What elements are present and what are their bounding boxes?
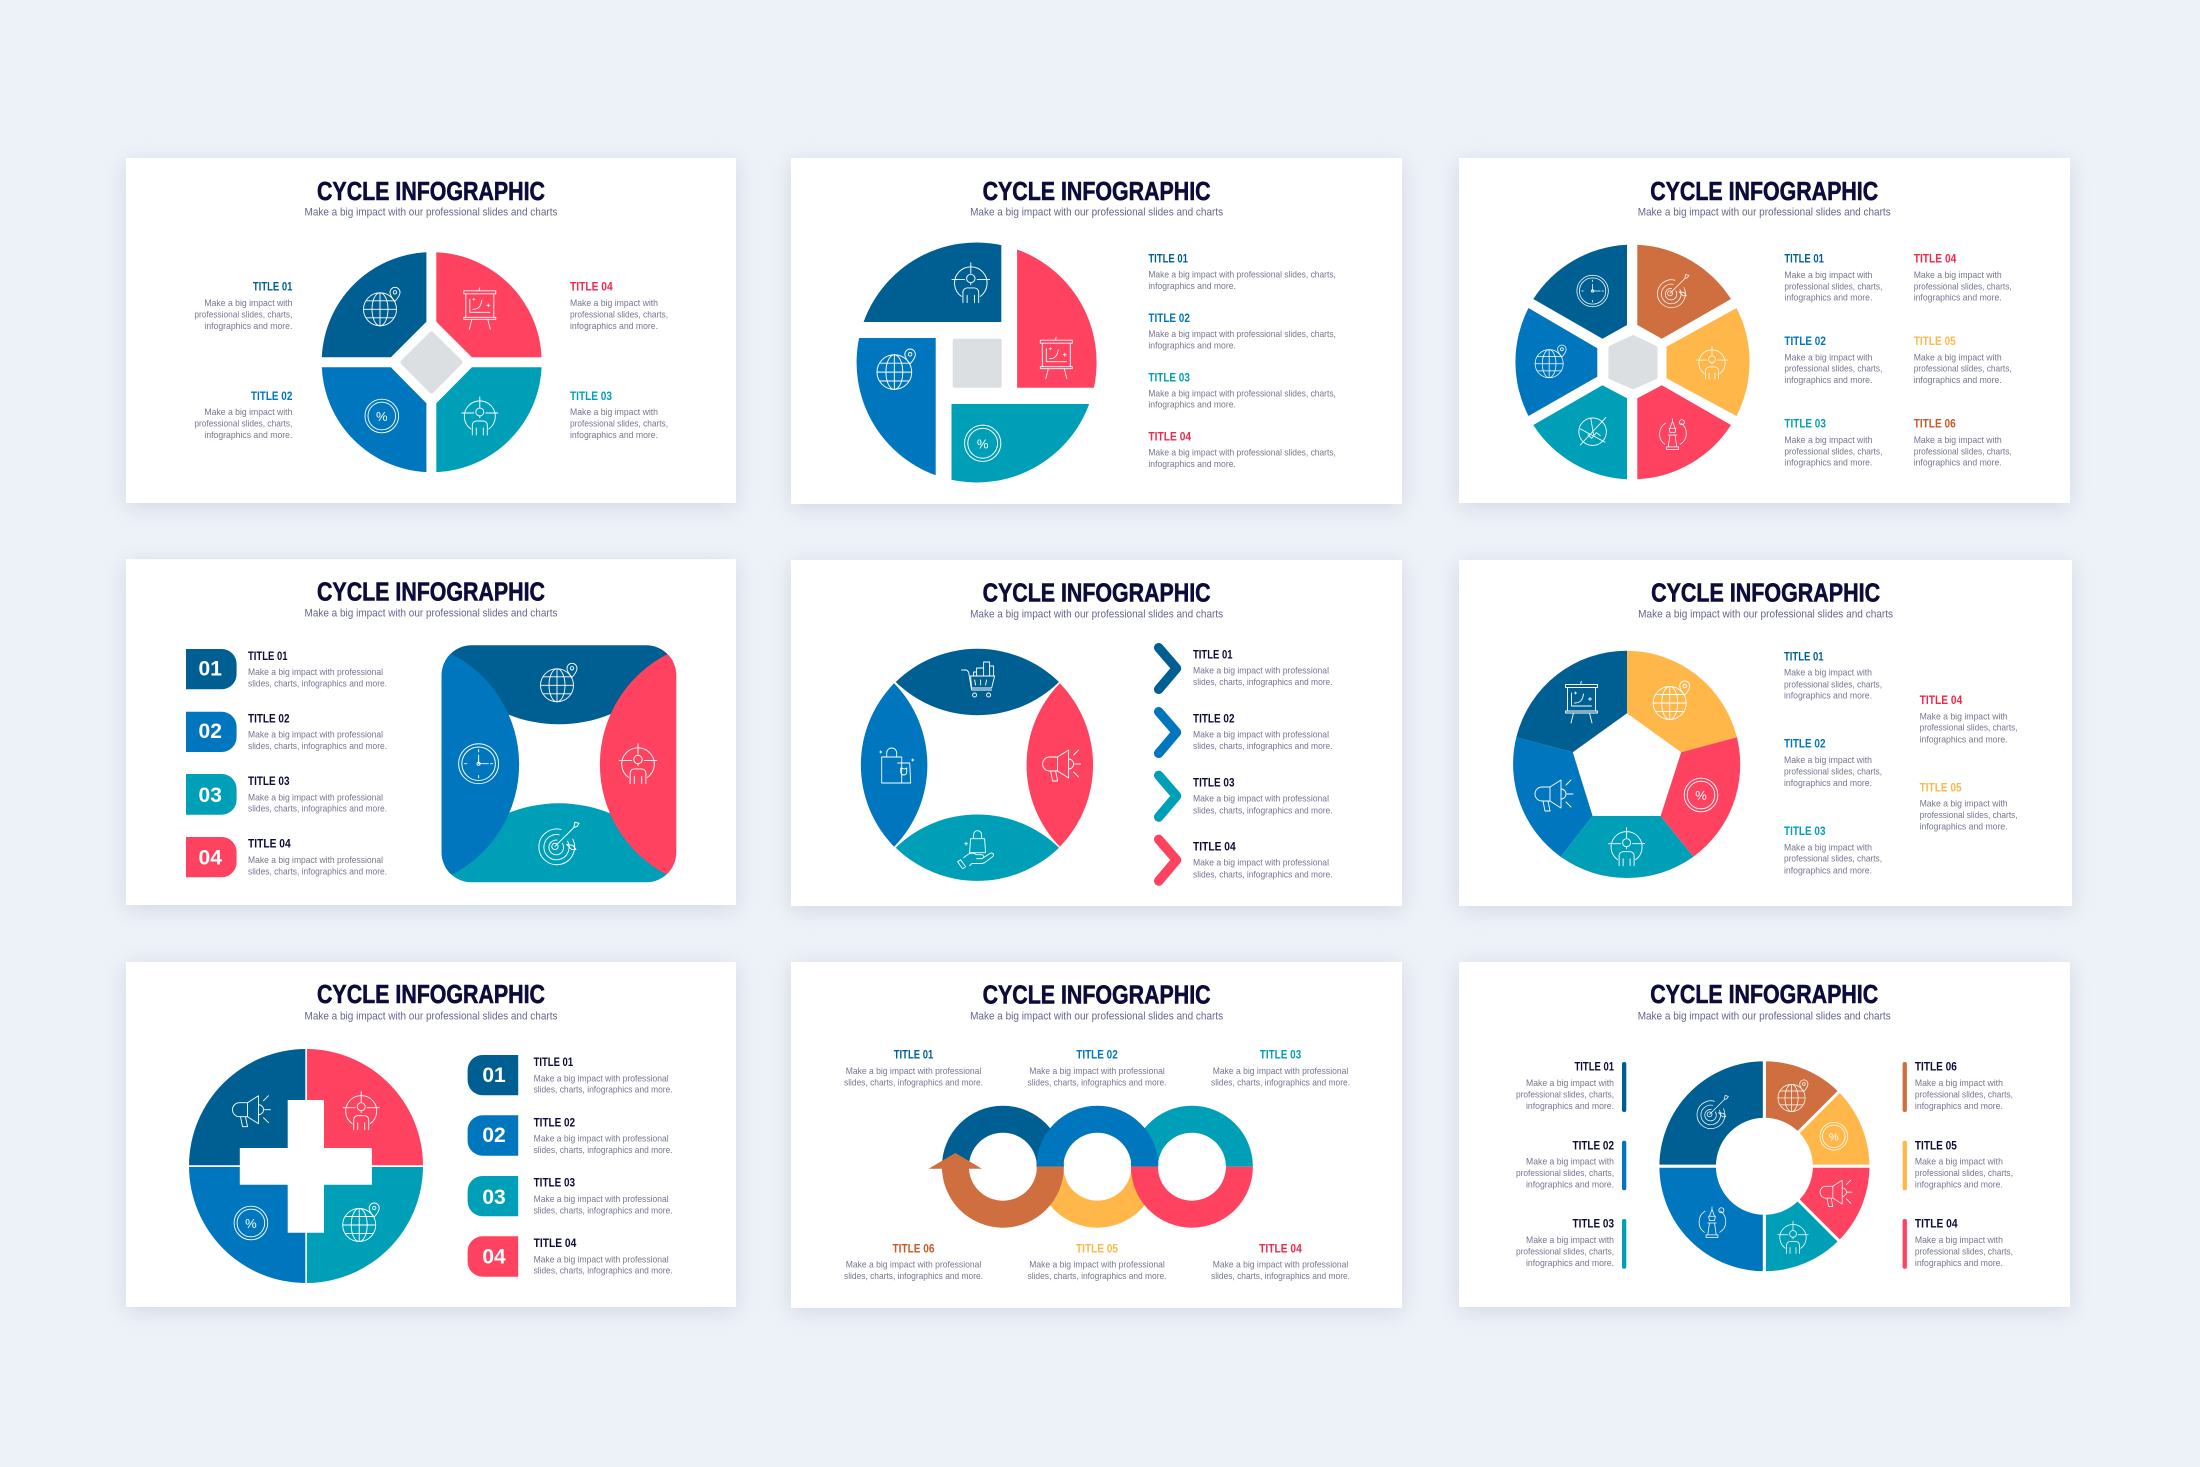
text: title 04: Make a big impact with professional [534, 1253, 669, 1264]
text: title 02: TITLE 02 [1193, 714, 1234, 726]
text: title 02: Make a big impact with professional [248, 729, 383, 740]
text: title 05 [1915, 1140, 2013, 1190]
text: title 03: professional slides, charts, [1516, 1245, 1614, 1256]
text: title 05: TITLE 05 [1915, 1140, 1957, 1152]
text: title 04 [1211, 1243, 1350, 1281]
heading [1638, 981, 1891, 1022]
text: title 02: professional slides, charts, [1516, 1167, 1614, 1178]
text: title 05: Make a big impact with [1915, 1156, 2003, 1167]
bar 06 [1903, 1062, 1907, 1112]
text: title 03 [1211, 1050, 1350, 1088]
text: title 02 [1028, 1050, 1166, 1088]
text: title 02: Make a big impact with [204, 406, 292, 417]
cycle diagram: % [977, 436, 989, 451]
heading: Make a big impact with our professional slides and charts [1638, 1010, 1891, 1022]
text: title 01: TITLE 01 [534, 1057, 574, 1069]
text: title 04: slides, charts, infographics and more. [248, 865, 387, 876]
heading: CYCLE INFOGRAPHIC [317, 178, 545, 206]
text: title 03: professional slides, charts, [1784, 445, 1882, 456]
text: title 01 [194, 282, 293, 331]
text: title 05: TITLE 05 [1914, 336, 1956, 348]
text: title 06: professional slides, charts, [1914, 445, 2012, 456]
heading: CYCLE INFOGRAPHIC [1651, 579, 1880, 607]
text: title 04 [1920, 695, 2018, 744]
text: title 02 [248, 713, 387, 751]
text: title 03: slides, charts, infographics and more. [1193, 804, 1333, 815]
text: title 02: slides, charts, infographics and more. [1028, 1077, 1166, 1088]
heading [304, 178, 558, 219]
number tab 03 [186, 774, 237, 815]
cycle diagram: % [245, 1216, 257, 1231]
text: title 03: TITLE 03 [1193, 778, 1234, 790]
text: title 02: infographics and more. [1784, 777, 1872, 788]
text: title 02: professional slides, charts, [194, 418, 292, 428]
text: title 03: TITLE 03 [534, 1178, 575, 1190]
text: title 06: TITLE 06 [1914, 419, 1956, 431]
text: title 04 [1193, 842, 1333, 879]
number tab 03: 03 [199, 784, 222, 807]
text: title 04: infographics and more. [1920, 733, 2008, 744]
text: title 01: slides, charts, infographics and more. [1193, 676, 1333, 687]
text: title 04: TITLE 04 [1915, 1219, 1958, 1231]
card background [791, 560, 1402, 906]
text: title 01 [1784, 651, 1882, 701]
card background [1459, 158, 2070, 503]
number tab 04: 04 [199, 846, 222, 870]
text: title 05: infographics and more. [1915, 1179, 2003, 1190]
text: title 03: Make a big impact with [1526, 1234, 1614, 1245]
text: title 04: infographics and more. [1915, 1257, 2003, 1268]
arrow head [928, 1153, 982, 1169]
card background [126, 962, 736, 1307]
text: title 01: TITLE 01 [248, 651, 288, 663]
chevron 4 [1159, 839, 1176, 881]
cycle diagram [1658, 1060, 1871, 1273]
text: title 02 [534, 1117, 673, 1155]
text: title 04: slides, charts, infographics and more. [1211, 1270, 1350, 1281]
text: title 02 [1516, 1140, 1614, 1190]
text: title 02: infographics and more. [1526, 1179, 1614, 1190]
heading: Make a big impact with our professional slides and charts [970, 609, 1224, 621]
text: title 04 [1914, 254, 2012, 303]
heading: CYCLE INFOGRAPHIC [983, 981, 1211, 1009]
card background [126, 158, 736, 503]
chevron 1 [1159, 648, 1176, 689]
text: title 03: infographics and more. [1148, 399, 1236, 410]
cycle diagram: % [376, 409, 388, 424]
text: title 01 [844, 1050, 983, 1088]
number tab 04 [186, 837, 237, 877]
heading: CYCLE INFOGRAPHIC [1650, 178, 1878, 206]
text: title 01: TITLE 01 [1148, 254, 1188, 266]
text: title 01: infographics and more. [1526, 1100, 1614, 1111]
number tab 01: 01 [199, 658, 222, 681]
text: title 06: infographics and more. [1915, 1100, 2003, 1111]
text: title 03: Make a big impact with professional [534, 1193, 669, 1204]
text: title 05: slides, charts, infographics and more. [1028, 1270, 1166, 1281]
text: title 03 [1516, 1219, 1614, 1268]
text: title 03: TITLE 03 [1148, 372, 1190, 384]
text: title 01: Make a big impact with [204, 297, 292, 308]
bar 03 [1622, 1219, 1626, 1269]
text: title 01: TITLE 01 [1574, 1062, 1614, 1074]
cycle diagram [189, 1049, 423, 1283]
text: title 02: professional slides, charts, [1784, 363, 1882, 374]
heading: Make a big impact with our professional slides and charts [970, 1011, 1224, 1023]
cycle diagram: % [1695, 788, 1707, 803]
text: title 02: slides, charts, infographics and more. [1193, 740, 1333, 751]
text: title 04: TITLE 04 [1148, 432, 1192, 444]
text: title 04: slides, charts, infographics and more. [534, 1265, 673, 1276]
text: title 02: infographics and more. [1784, 374, 1872, 385]
text: title 04: infographics and more. [1148, 458, 1236, 469]
text: title 02 [1784, 336, 1882, 385]
text: title 05: professional slides, charts, [1914, 363, 2012, 374]
text: title 04: professional slides, charts, [570, 308, 668, 320]
text: title 04: TITLE 04 [1259, 1243, 1302, 1255]
number tab 04: 04 [482, 1246, 506, 1268]
text: title 04: TITLE 04 [248, 839, 291, 851]
text: title 03 [1193, 778, 1333, 815]
text: title 06: infographics and more. [1914, 457, 2002, 468]
text: title 02: TITLE 02 [248, 713, 290, 725]
text: title 06: professional slides, charts, [1915, 1089, 2013, 1100]
text: title 06: TITLE 06 [1915, 1062, 1957, 1074]
text: title 04: Make a big impact with [1914, 269, 2002, 280]
text: title 03: infographics and more. [1784, 457, 1872, 468]
panel 4: rounded square cycle with number tabs [120, 558, 742, 914]
text: title 03 [1148, 372, 1336, 410]
text: title 05 [1914, 336, 2012, 385]
text: title 02: slides, charts, infographics and more. [534, 1144, 673, 1155]
text: title 01: professional slides, charts, [1784, 280, 1882, 291]
text: title 02: TITLE 02 [1076, 1050, 1118, 1062]
text: title 01: infographics and more. [1784, 690, 1872, 701]
text: title 03 [248, 776, 387, 814]
number tab 02: 02 [482, 1124, 506, 1147]
text: title 03: Make a big impact with professional [248, 791, 383, 802]
text: title 02: TITLE 02 [1572, 1140, 1614, 1152]
text: title 04: Make a big impact with [1920, 710, 2008, 721]
text: title 02: TITLE 02 [1148, 313, 1190, 325]
heading: Make a big impact with our professional slides and charts [970, 207, 1224, 219]
panel 9: six-part donut with side bars [1459, 962, 2070, 1307]
text: title 03: slides, charts, infographics and more. [534, 1204, 673, 1215]
heading: CYCLE INFOGRAPHIC [317, 579, 545, 607]
text: title 02: Make a big impact with professional [1029, 1065, 1165, 1076]
panel 3: six-part hexagon wheel [1459, 158, 2070, 503]
text: title 01 [1148, 254, 1336, 291]
text: title 02: slides, charts, infographics and more. [248, 740, 387, 751]
text: title 03: Make a big impact with [1784, 841, 1872, 852]
text: title 03: infographics and more. [570, 429, 658, 440]
text: title 05: Make a big impact with [1914, 351, 2002, 362]
text: title 01: infographics and more. [204, 320, 292, 331]
heading [1638, 178, 1891, 219]
text: title 04: TITLE 04 [534, 1238, 577, 1250]
text: title 01: Make a big impact with professional [534, 1072, 669, 1083]
text: title 01: infographics and more. [1148, 280, 1236, 291]
bar 04 [1903, 1219, 1907, 1269]
text: title 02: Make a big impact with professional [534, 1133, 669, 1144]
text: title 06 [844, 1243, 983, 1281]
number tab 02: 02 [199, 720, 222, 743]
text: title 06: Make a big impact with professional [846, 1259, 981, 1270]
text: title 04: TITLE 04 [570, 282, 613, 294]
text: title 03: TITLE 03 [570, 391, 612, 403]
text: title 03 [570, 391, 668, 440]
bar 02 [1622, 1141, 1626, 1190]
text: title 06 [1914, 419, 2012, 468]
card background [1459, 560, 2072, 906]
card background [1459, 962, 2070, 1307]
text: title 04: TITLE 04 [1914, 254, 1957, 266]
text: title 04 [248, 839, 387, 876]
chevron 3 [1159, 775, 1176, 817]
text: title 05 [1028, 1243, 1166, 1281]
text: title 01: TITLE 01 [894, 1050, 934, 1062]
panel 8: interlocking rings [791, 962, 1402, 1308]
text: title 02: Make a big impact with professional slides, charts, [1148, 328, 1336, 339]
cycle diagram [442, 645, 676, 882]
text: title 03 [1784, 826, 1882, 875]
text: title 04: infographics and more. [570, 320, 658, 331]
text: title 02: Make a big impact with [1784, 754, 1872, 765]
text: title 03: TITLE 03 [1260, 1050, 1301, 1062]
cycle diagram [1515, 245, 1750, 479]
heading: Make a big impact with our professional slides and charts [304, 608, 558, 620]
text: title 04: Make a big impact with [1915, 1234, 2003, 1245]
text: title 03: Make a big impact with [1784, 434, 1872, 445]
panel 2: offset quarter circle [791, 158, 1402, 504]
text: title 01: infographics and more. [1784, 292, 1872, 303]
bar 05 [1903, 1141, 1907, 1190]
text: title 03: TITLE 03 [1784, 419, 1826, 431]
text: title 02: infographics and more. [1148, 339, 1236, 350]
text: title 04: Make a big impact with [570, 297, 658, 308]
text: title 03: Make a big impact with [570, 406, 658, 417]
text: title 01: professional slides, charts, [1784, 678, 1882, 689]
heading [304, 579, 558, 620]
text: title 01: Make a big impact with professional slides, charts, [1148, 269, 1336, 280]
cycle diagram [857, 243, 1097, 482]
text: title 01: slides, charts, infographics and more. [248, 678, 387, 689]
heading: Make a big impact with our professional slides and charts [304, 207, 558, 219]
text: title 02: infographics and more. [204, 429, 292, 440]
text: title 01: slides, charts, infographics and more. [534, 1084, 673, 1095]
text: title 03: infographics and more. [1526, 1257, 1614, 1268]
heading: CYCLE INFOGRAPHIC [317, 981, 545, 1009]
text: title 01: professional slides, charts, [194, 308, 292, 320]
text: title 02: Make a big impact with professional [1193, 729, 1329, 740]
text: title 04 [570, 282, 668, 331]
text: title 01: Make a big impact with [1784, 667, 1872, 678]
text: title 03: professional slides, charts, [1784, 853, 1882, 864]
heading: Make a big impact with our professional slides and charts [1638, 609, 1894, 621]
text: title 06 [1915, 1062, 2013, 1111]
cycle diagram [322, 252, 542, 472]
text: title 03: professional slides, charts, [570, 418, 668, 428]
number tab 02 [186, 712, 237, 752]
panel 1: four-part circle with diamond centre [126, 158, 736, 503]
heading [1638, 579, 1894, 621]
panel 6: pentagon ring [1459, 560, 2072, 906]
number tab 01: 01 [482, 1064, 506, 1087]
panel 5: four lens shapes with chevrons [791, 560, 1402, 906]
card background [791, 962, 1402, 1308]
text: title 01: Make a big impact with professional [1193, 665, 1329, 676]
text: title 02 [1784, 739, 1882, 788]
text: title 04: slides, charts, infographics and more. [1193, 868, 1333, 879]
text: title 02: TITLE 02 [534, 1117, 575, 1129]
text: title 01: Make a big impact with professional [846, 1065, 981, 1076]
text: title 03: TITLE 03 [1784, 826, 1826, 838]
text: title 04 [534, 1238, 673, 1276]
text: title 02 [1148, 313, 1336, 350]
chevron 2 [1159, 712, 1176, 753]
bar 01 [1622, 1062, 1626, 1112]
number tab 04 [468, 1236, 518, 1277]
text: title 01: Make a big impact with [1526, 1077, 1614, 1088]
text: title 06: slides, charts, infographics and more. [844, 1270, 983, 1281]
text: title 02: TITLE 02 [251, 391, 292, 403]
text: title 04 [1915, 1219, 2013, 1268]
number tab 01 [468, 1055, 518, 1095]
panel 7: circle with plus cut-out [126, 962, 736, 1307]
cycle diagram [1513, 651, 1740, 878]
text: title 01 [534, 1057, 673, 1095]
text: title 03: TITLE 03 [1572, 1219, 1614, 1231]
card background [791, 158, 1402, 504]
text: title 05: Make a big impact with [1920, 798, 2008, 809]
text: title 03: slides, charts, infographics and more. [1211, 1077, 1350, 1088]
heading: CYCLE INFOGRAPHIC [983, 579, 1211, 607]
text: title 01: TITLE 01 [1784, 254, 1824, 266]
text: title 01: professional slides, charts, [1516, 1089, 1614, 1100]
text: title 02: professional slides, charts, [1784, 765, 1882, 776]
text: title 05: professional slides, charts, [1920, 809, 2018, 820]
text: title 01: Make a big impact with professional [248, 666, 383, 677]
text: title 01: TITLE 01 [1193, 649, 1233, 661]
text: title 04: professional slides, charts, [1914, 280, 2012, 291]
heading: CYCLE INFOGRAPHIC [983, 178, 1211, 206]
text: title 01 [248, 651, 387, 689]
text: title 04: professional slides, charts, [1915, 1245, 2013, 1256]
text: title 03: Make a big impact with professional [1193, 793, 1329, 804]
text: title 02 [194, 391, 292, 440]
heading: CYCLE INFOGRAPHIC [1650, 981, 1878, 1009]
text: title 02: TITLE 02 [1784, 336, 1826, 348]
text: title 02: TITLE 02 [1784, 739, 1826, 751]
heading [970, 178, 1224, 219]
text: title 05 [1920, 782, 2018, 832]
text: title 04: Make a big impact with professional [1193, 857, 1329, 868]
text: title 02: Make a big impact with [1784, 351, 1872, 362]
text: title 06: Make a big impact with [1914, 434, 2002, 445]
text: title 03: Make a big impact with professional slides, charts, [1148, 387, 1336, 398]
card background [126, 559, 736, 905]
text: title 05: professional slides, charts, [1915, 1167, 2013, 1178]
text: title 01 [1193, 649, 1333, 687]
text: title 03: infographics and more. [1784, 864, 1872, 875]
text: title 01: TITLE 01 [1784, 651, 1824, 663]
number tab 03: 03 [482, 1186, 506, 1209]
text: title 04: TITLE 04 [1193, 842, 1236, 854]
text: title 02: Make a big impact with [1526, 1156, 1614, 1167]
text: title 05: infographics and more. [1920, 821, 2008, 832]
cycle diagram [928, 1106, 1253, 1228]
text: title 03 [1784, 419, 1882, 468]
heading [304, 981, 558, 1022]
heading [970, 981, 1224, 1023]
text: title 03: slides, charts, infographics and more. [248, 803, 387, 814]
text: title 01 [1784, 254, 1882, 303]
heading: Make a big impact with our professional slides and charts [304, 1010, 558, 1022]
text: title 01: slides, charts, infographics and more. [844, 1077, 983, 1088]
text: title 04: infographics and more. [1914, 292, 2002, 303]
cycle diagram: % [1829, 1131, 1839, 1143]
text: title 04: Make a big impact with professional slides, charts, [1148, 447, 1336, 458]
text: title 05: TITLE 05 [1076, 1243, 1119, 1255]
text: title 04: Make a big impact with professional [248, 854, 383, 865]
text: title 01: Make a big impact with [1784, 269, 1872, 280]
text: title 04 [1148, 432, 1336, 469]
heading: Make a big impact with our professional slides and charts [1638, 207, 1891, 219]
cycle diagram [861, 649, 1093, 881]
number tab 01 [186, 649, 237, 689]
number tab 03 [468, 1176, 518, 1216]
text: title 05: TITLE 05 [1920, 782, 1962, 794]
text: title 05: Make a big impact with professional [1029, 1259, 1165, 1270]
text: title 04: professional slides, charts, [1920, 722, 2018, 733]
text: title 01: TITLE 01 [253, 282, 293, 294]
text: title 02 [1193, 714, 1333, 751]
text: title 01 [1516, 1062, 1614, 1111]
text: title 03 [534, 1178, 673, 1215]
number tab 02 [468, 1115, 518, 1156]
text: title 03: Make a big impact with professional [1213, 1065, 1348, 1076]
text: title 05: infographics and more. [1914, 374, 2002, 385]
heading [970, 579, 1224, 621]
text: title 04: TITLE 04 [1920, 695, 1963, 707]
text: title 03: TITLE 03 [248, 776, 290, 788]
text: title 04: Make a big impact with professional [1213, 1259, 1348, 1270]
text: title 06: Make a big impact with [1915, 1077, 2003, 1088]
text: title 06: TITLE 06 [892, 1243, 934, 1255]
